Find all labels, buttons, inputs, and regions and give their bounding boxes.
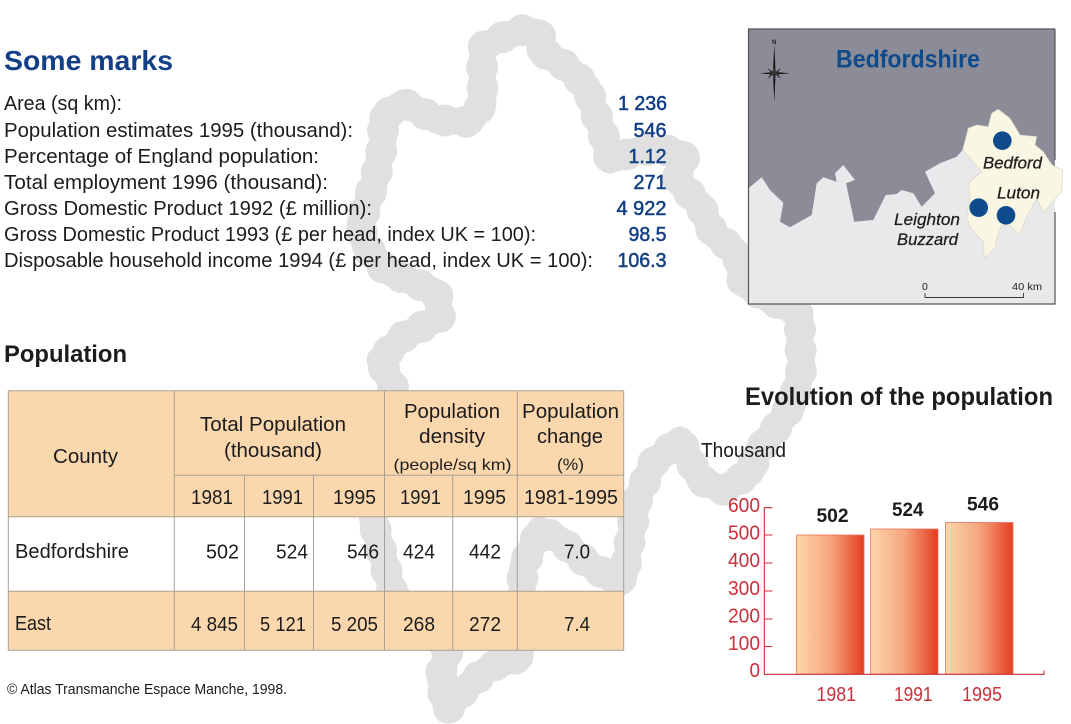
- map title: Bedfordshire: [836, 46, 980, 74]
- compass north letter: N: [772, 40, 776, 46]
- label: Leighton Buzzard: Buzzard: [897, 230, 959, 249]
- row: Bedfordshire: 524: [276, 542, 308, 564]
- city marker: Leighton Buzzard: [969, 198, 988, 217]
- row: GDP 1992: 4 922: [616, 198, 666, 220]
- column header: population density: (people/sq km): [394, 457, 512, 474]
- column header: population density: Population: [404, 401, 500, 423]
- year headers: 1995: [463, 487, 506, 509]
- row: East: 7.4: [564, 614, 590, 636]
- row: Bedfordshire: 424: [403, 542, 435, 564]
- label: Luton: Luton: [997, 184, 1040, 203]
- table grid: [8, 391, 624, 650]
- scale bar: [922, 281, 1042, 298]
- row: percentage of England population: 1.12: [628, 146, 666, 168]
- column header: population change: change: [537, 426, 603, 448]
- column header: total population: (thousand): [224, 440, 322, 462]
- year headers: 1991: [262, 487, 303, 509]
- sea / dark area: [748, 29, 1055, 227]
- axes: [764, 508, 1044, 674]
- scale bar: 40 km: [1012, 281, 1042, 293]
- year headers: 1991: [400, 487, 441, 509]
- bar 1981: [796, 535, 864, 674]
- bar value labels: 546: [967, 494, 999, 516]
- row: East: 5 205: [331, 614, 378, 636]
- table header fill: [8, 391, 624, 517]
- row: total employment: [4, 172, 666, 194]
- year headers: [191, 487, 618, 509]
- row: GDP 1993: 98.5: [628, 224, 666, 246]
- column header: population change: Population: [522, 401, 619, 423]
- city marker: Luton: [997, 206, 1015, 225]
- panel: evolution of the population: [701, 383, 1053, 706]
- row: area: Area (sq km):: [4, 93, 122, 115]
- bar 1995: [946, 522, 1013, 674]
- x axis labels: 1991: [894, 684, 932, 706]
- year headers: 1995: [333, 487, 376, 509]
- row: Bedfordshire: 442: [469, 542, 501, 564]
- frame: [748, 29, 1055, 304]
- heading: some marks: Some marks: [4, 45, 173, 76]
- y axis labels: [728, 495, 760, 682]
- column header: population change: [522, 401, 619, 474]
- row: East: 268: [403, 614, 435, 636]
- bar value labels: 502: [816, 505, 849, 527]
- axis unit: thousand: Thousand: [701, 440, 786, 462]
- row: Bedfordshire: [15, 541, 590, 564]
- row: total employment: Total employment 1996 (thousand):: [4, 172, 328, 194]
- panel: map of Bedfordshire: [748, 29, 1063, 304]
- y axis labels: 200: [728, 606, 760, 628]
- label: Leighton Buzzard: [894, 210, 960, 249]
- panel: population table: [4, 341, 624, 650]
- bar 1991: [870, 529, 938, 674]
- row: disposable household income: Disposable household income 1994 (£ per head, index UK = 100):: [4, 250, 593, 272]
- y axis labels: 400: [728, 550, 760, 572]
- row: GDP 1992: Gross Domestic Product 1992 (£ million):: [4, 198, 372, 220]
- table east row fill: [8, 591, 624, 650]
- source note: © Atlas Transmanche Espace Manche, 1998.: [7, 682, 287, 698]
- column header: county: County: [53, 446, 118, 468]
- row: Bedfordshire: 502: [206, 542, 239, 564]
- background: grey England outline: [360, 30, 802, 710]
- row: disposable household income: 106.3: [618, 250, 666, 272]
- bar value labels: [816, 494, 999, 527]
- y axis labels: 600: [728, 495, 760, 517]
- year headers: 1981-1995: [524, 487, 618, 509]
- y axis labels: 100: [728, 633, 760, 655]
- scale bar: 0: [922, 281, 928, 293]
- y axis labels: 500: [728, 522, 760, 544]
- row: Bedfordshire: 546: [347, 542, 379, 564]
- map base: [748, 29, 1055, 304]
- row: total employment: 271: [634, 172, 666, 194]
- column header: total population: Total Population: [200, 414, 346, 436]
- label: Bedford: Bedford: [983, 154, 1043, 172]
- heading: evolution of the population: Evolution of the population: [745, 383, 1053, 411]
- row: percentage of England population: Percentage of England population:: [4, 146, 319, 168]
- row: Bedfordshire: Bedfordshire: [15, 541, 129, 563]
- heading: population: Population: [4, 341, 127, 368]
- label: Leighton Buzzard: Leighton: [894, 210, 960, 229]
- year headers: 1981: [191, 487, 233, 509]
- icon: compass rose: [760, 40, 790, 102]
- row: population estimates: 546: [634, 120, 666, 142]
- column header: population density: [394, 401, 512, 474]
- row: Bedfordshire: 7.0: [564, 542, 590, 564]
- row: population estimates: Population estimates 1995 (thousand):: [4, 120, 353, 142]
- row: population estimates: [4, 120, 666, 142]
- bar value labels: 524: [892, 499, 924, 521]
- city marker: Bedford: [993, 131, 1012, 150]
- panel: some marks: [4, 45, 667, 272]
- y axis labels: 0: [750, 660, 760, 682]
- x axis labels: 1995: [962, 684, 1002, 706]
- column header: population change: (%): [557, 455, 584, 474]
- county shape: [963, 109, 1063, 258]
- row: area: 1 236: [618, 93, 667, 115]
- row: East: 272: [469, 614, 501, 636]
- row: East: 5 121: [260, 614, 306, 636]
- bar chart: [728, 494, 1044, 706]
- y axis labels: 300: [728, 578, 760, 600]
- row: GDP 1992: [4, 198, 666, 220]
- column header: total population: [200, 414, 346, 462]
- row: East: [15, 613, 590, 636]
- row: area: [4, 93, 667, 115]
- row: East: East: [15, 613, 51, 635]
- column header: population density: density: [419, 426, 485, 448]
- x axis labels: [816, 684, 1002, 706]
- row: East: 4 845: [191, 614, 238, 636]
- row: percentage of England population: [4, 146, 666, 168]
- x axis labels: 1981: [816, 684, 856, 706]
- row: GDP 1993: Gross Domestic Product 1993 (£ per head, index UK = 100):: [4, 224, 536, 246]
